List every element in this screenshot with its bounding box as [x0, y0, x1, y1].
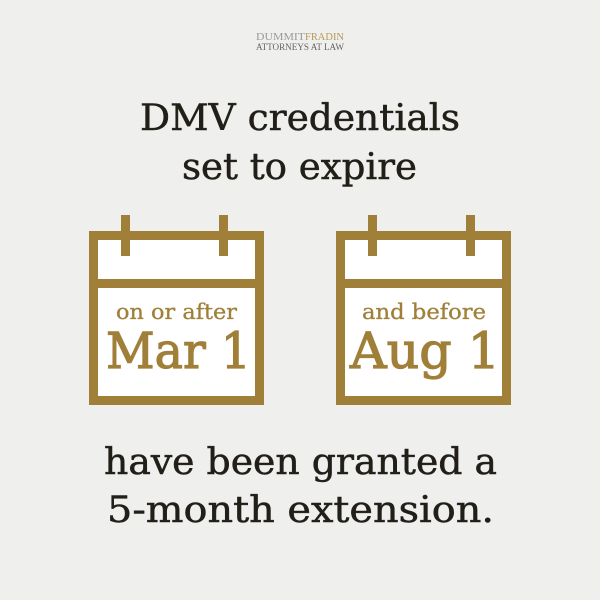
heading: DMV credentials set to expire: set to expire	[182, 147, 417, 188]
calendar: and before Aug 1	[336, 215, 511, 400]
logo: Dummit Fradin Attorneys at Law: DUMMIT	[256, 32, 305, 43]
logo: Dummit Fradin Attorneys at Law: ATTORNEYS AT LAW	[256, 43, 344, 53]
calendar: on or after Mar 1	[89, 215, 264, 400]
calendar: on or after Mar 1: on or after	[116, 300, 238, 324]
logo: Dummit Fradin Attorneys at Law: FRADIN	[305, 32, 344, 43]
closing statement: have been granted a 5-month extension: 5-month extension.	[107, 490, 494, 531]
calendar: and before Aug 1: and before	[362, 300, 486, 324]
heading: DMV credentials set to expire	[140, 98, 460, 188]
closing statement: have been granted a 5-month extension: have been granted a	[104, 442, 497, 483]
calendar: on or after Mar 1: Mar 1	[106, 322, 251, 380]
logo: Dummit Fradin Attorneys at Law	[256, 32, 344, 53]
closing statement: have been granted a 5-month extension	[104, 442, 497, 531]
heading: DMV credentials set to expire: DMV credentials	[140, 98, 460, 139]
calendar: and before Aug 1: Aug 1	[349, 322, 500, 380]
